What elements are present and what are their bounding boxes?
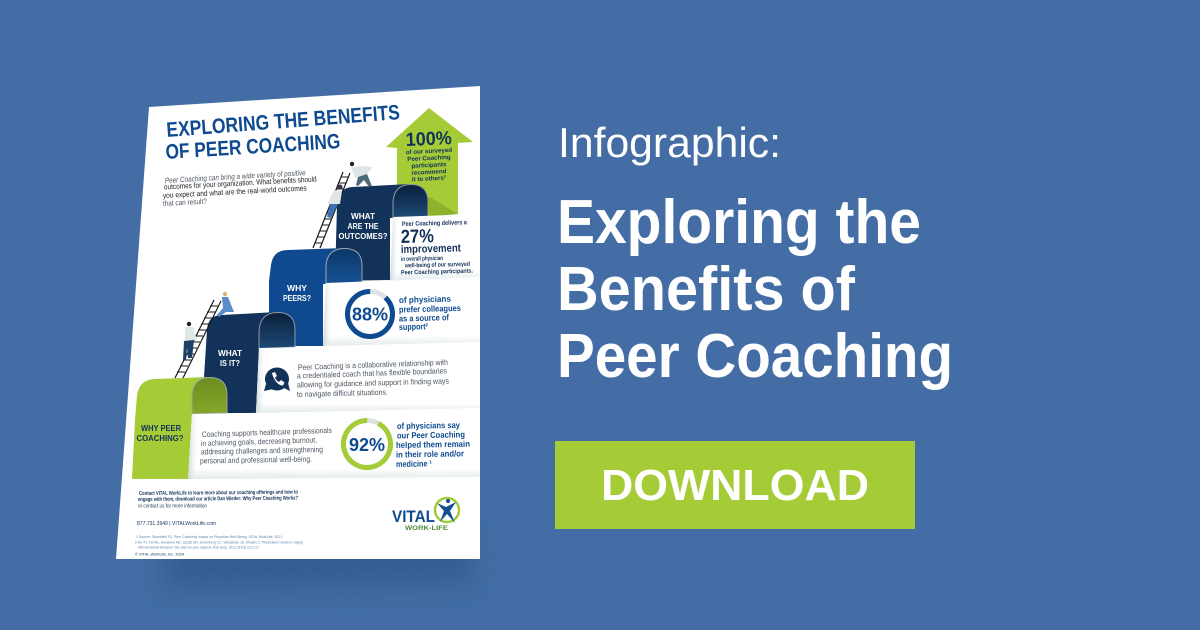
88 percent caption: support² <box>399 321 428 332</box>
ring chart: 92% <box>335 412 399 476</box>
ladders <box>175 172 350 378</box>
document page <box>116 86 480 559</box>
ribbon: why peers <box>269 248 362 346</box>
ring chart: 92%: 92% <box>349 435 385 455</box>
ribbon: what are the outcomes: ARE THE <box>348 222 379 231</box>
arrow statistic: recommend <box>411 168 447 177</box>
intro text: outcomes for your organization. What benefits should <box>164 175 317 191</box>
panel: outcomes statistic: Peer Coaching participants. <box>401 268 473 276</box>
contact text <box>137 490 298 527</box>
ring chart: 88% <box>338 282 402 346</box>
panel: outcomes statistic: Peer Coaching delivers a <box>402 219 467 228</box>
arrow statistic: participants <box>411 161 447 170</box>
88 percent caption: of physicians <box>399 294 451 305</box>
88 percent caption: as a source of <box>399 312 449 323</box>
ribbon: why peers: PEERS? <box>283 294 311 303</box>
infographic document <box>116 86 480 559</box>
ribbon: why peer coaching: WHY PEER <box>141 424 181 433</box>
description text: a credentialed coach that has flexible boundaries <box>297 366 447 380</box>
88 percent caption: prefer colleagues <box>399 303 461 314</box>
description text: addressing challenges and strengthening <box>201 445 323 456</box>
intro text: that can result? <box>163 197 207 208</box>
VITAL WorkLife logo <box>392 498 459 532</box>
panel: outcomes statistic: 27% <box>401 226 434 248</box>
ribbon: what is it: WHAT <box>218 349 242 358</box>
intro text: you expect and what are the real-world outcomes <box>163 183 307 200</box>
intro text <box>163 168 317 208</box>
92 percent caption: our Peer Coaching <box>397 429 465 440</box>
icon: phone speech bubble <box>264 368 290 391</box>
panel: outcomes statistic: improvement <box>401 242 461 256</box>
92 percent caption: of physicians say <box>397 420 460 431</box>
92 percent caption: medicine ¹ <box>396 458 432 469</box>
92 percent caption <box>396 420 470 469</box>
main heading <box>557 188 953 391</box>
references: © VITAL WorkLife, Inc. 2024 <box>135 552 185 556</box>
ring chart: 88%: 88% <box>352 304 388 324</box>
panel: what is it description <box>256 343 480 413</box>
description text: personal and professional well-being. <box>200 455 312 465</box>
contact text: Contact VITAL WorkLife to learn more about our coaching offerings and how to <box>139 490 298 497</box>
intro text: Peer Coaching can bring a wide variety of positive <box>165 168 306 185</box>
document shadow <box>165 535 472 588</box>
description text: allowing for guidance and support in finding ways <box>297 377 449 389</box>
92 percent caption: helped them remain <box>396 439 470 450</box>
description text <box>200 426 332 465</box>
document title <box>165 101 401 164</box>
ribbon: what is it: IS IT? <box>220 359 240 368</box>
ribbon: what are the outcomes <box>335 184 458 281</box>
panel: outcomes statistic: well-being of our surveyed <box>404 261 470 270</box>
VITAL WorkLife logo: VITAL <box>392 507 435 526</box>
references: 2 Hu YY, Fix ML, Hevelone ND, Lipsitz SR, Greenberg CC, Weissman JS, Shapiro J. Physicians' needs in coping <box>135 540 303 544</box>
arrow statistic <box>405 128 453 183</box>
ribbon: what are the outcomes: WHAT <box>351 212 375 221</box>
ribbon: what are the outcomes: OUTCOMES? <box>338 232 388 241</box>
description text: Peer Coaching is a collaborative relationship with <box>298 358 448 372</box>
document title: EXPLORING THE BENEFITS <box>166 101 401 142</box>
ribbon: what is it <box>202 312 295 413</box>
description text: in achieving goals, decreasing burnout, <box>201 435 317 448</box>
download button <box>555 441 915 529</box>
green arrow <box>386 108 473 214</box>
description text: Coaching supports healthcare professionals <box>202 426 332 439</box>
description text <box>297 358 449 399</box>
contact text: 877.731.3949 | VITALWorkLife.com <box>137 521 216 527</box>
references <box>135 534 303 556</box>
contact text: engage with them, download our article Dan Wieder: Why Peer Coaching Works? <box>138 496 298 503</box>
arrow statistic: of our surveyed <box>406 147 453 156</box>
92 percent caption: in their role and/or <box>396 448 465 459</box>
panel: why peer coaching <box>188 409 480 479</box>
VITAL WorkLife logo: WORK-LIFE <box>405 526 448 532</box>
panel: outcomes statistic <box>390 214 480 281</box>
88 percent caption <box>399 294 461 332</box>
panel: 88 percent statistic <box>323 277 480 346</box>
ribbon: why peer coaching <box>132 377 227 479</box>
panel: outcomes statistic: in overall physician <box>401 255 443 263</box>
document title: OF PEER COACHING <box>165 130 341 164</box>
download button: DOWNLOAD <box>601 461 869 510</box>
main heading: Peer Coaching <box>557 322 953 391</box>
ribbon: why peer coaching: COACHING? <box>136 434 184 443</box>
main heading: Exploring the <box>557 188 921 257</box>
ribbon: why peers: WHY <box>287 284 308 293</box>
label: Infographic: Infographic: <box>558 119 781 166</box>
description text: to navigate difficult situations. <box>297 388 388 399</box>
arrow statistic: it to others² <box>412 175 446 183</box>
references: 1 Source: Shanafelt TD. Peer Coaching Impact on Physician Well-Being. VITAL WorkLife; 2021. <box>136 534 283 539</box>
arrow statistic: 100% <box>405 128 452 151</box>
figures climbing <box>183 162 373 360</box>
references: with emotional stressors: the case for peer support. Arch Surg. 2012;147(3):212-217. <box>138 544 260 550</box>
arrow statistic: Peer Coaching <box>407 154 451 163</box>
main heading: Benefits of <box>557 255 855 324</box>
contact text: or contact us for more information <box>138 504 207 510</box>
